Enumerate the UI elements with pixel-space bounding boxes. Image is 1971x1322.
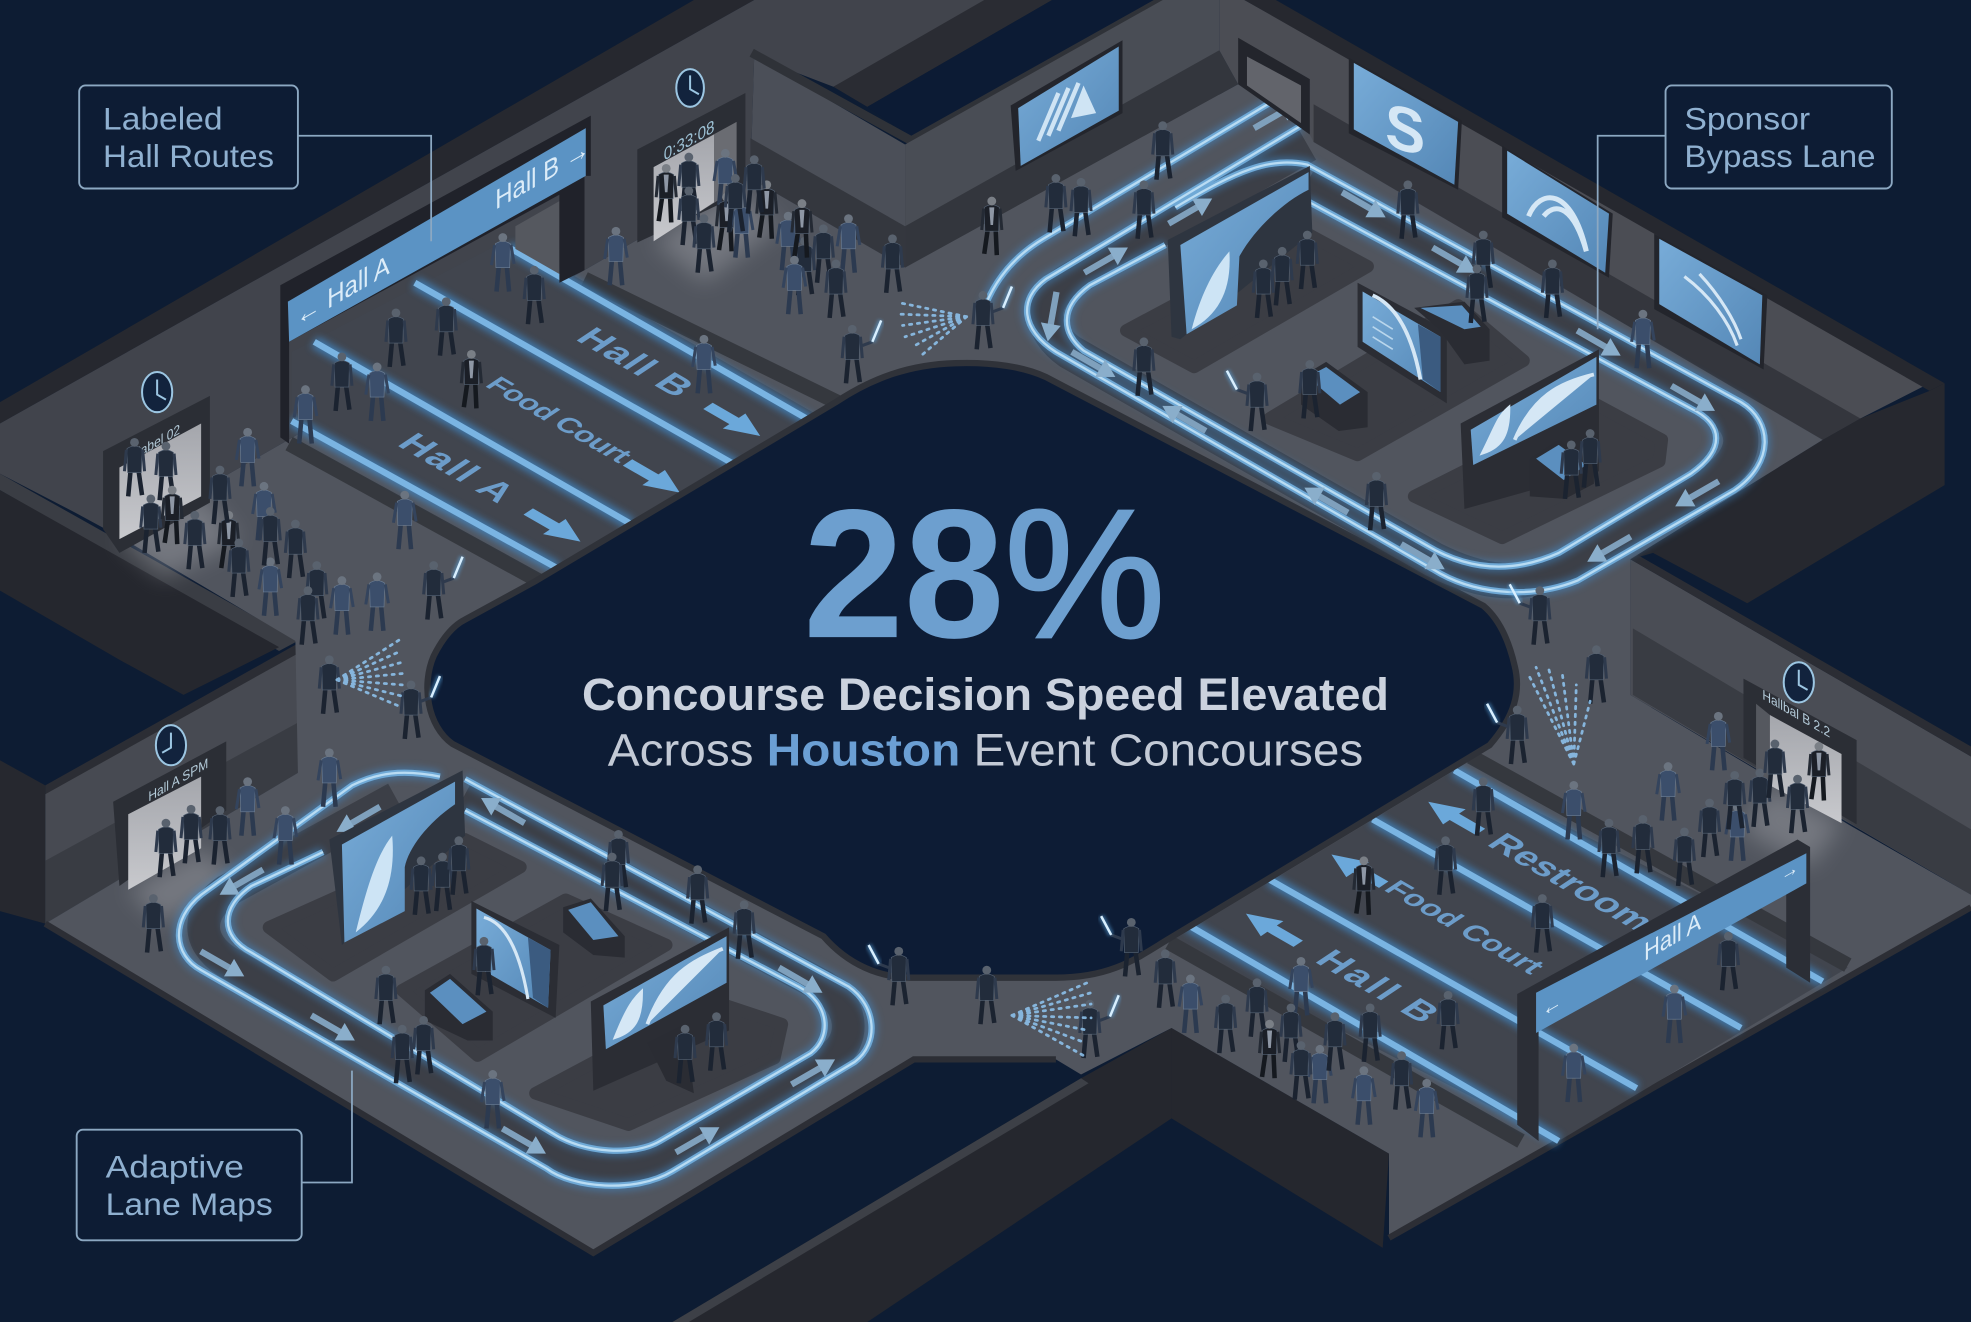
gantry arrow right: → bbox=[1781, 855, 1799, 887]
callout: adaptive lane maps: Lane Maps bbox=[106, 1187, 273, 1222]
hall top-left floor bbox=[289, 201, 842, 582]
door lower right: Hallbal B 2.2 bbox=[1762, 686, 1830, 741]
gantry text Hall A: ← Hall A bbox=[297, 248, 390, 333]
booths lower left bbox=[329, 770, 729, 1093]
screen swoosh bbox=[1502, 146, 1613, 278]
callout: labeled hall routes: Hall Routes bbox=[103, 139, 274, 174]
kiosks bbox=[1301, 302, 1594, 499]
booth 1 bbox=[1168, 166, 1312, 339]
door left: Hlabel 02 bbox=[129, 420, 180, 465]
people: lower-left zone bbox=[143, 748, 909, 1128]
callout: labeled hall routes bbox=[79, 85, 431, 241]
door lower left: Hall A SPM bbox=[148, 754, 208, 805]
clocks bbox=[142, 69, 1814, 765]
track arrows lower left bbox=[196, 789, 840, 1162]
callout: sponsor bypass lane: Sponsor bbox=[1684, 101, 1810, 136]
people: lower-right zone bbox=[1354, 645, 1829, 1102]
headline line 2: Across Houston Event Concourses bbox=[608, 724, 1363, 775]
floor label Hall A: Hall A bbox=[390, 427, 525, 508]
callout: labeled hall routes: Labeled bbox=[103, 101, 222, 136]
screen letter S: S bbox=[1385, 90, 1425, 170]
track loop: adaptive lane maps bbox=[179, 773, 872, 1186]
door upper right bbox=[1238, 38, 1310, 134]
gantry arrow left: ← bbox=[1542, 987, 1562, 1023]
gantry text Hall A lower: Hall A bbox=[1644, 906, 1701, 967]
screen letter S bbox=[1349, 58, 1462, 190]
booth 1 bbox=[329, 770, 465, 945]
people: top-left crowd bbox=[605, 149, 1002, 383]
central void bbox=[427, 363, 1517, 978]
track arrows upper right bbox=[1038, 94, 1724, 578]
headline stat: 28% bbox=[803, 471, 1165, 676]
callout: sponsor bypass lane: Bypass Lane bbox=[1684, 139, 1875, 174]
floor label Hall B lower: Hall B bbox=[1307, 943, 1449, 1028]
booth 3 bbox=[591, 927, 729, 1091]
service dark plates bbox=[1126, 234, 1662, 538]
light beam fans bbox=[337, 303, 1590, 1056]
door lower left bbox=[113, 741, 226, 890]
floor light spills at doors bbox=[119, 188, 1842, 924]
booth 2 bbox=[471, 901, 559, 1018]
callout: adaptive lane maps bbox=[77, 1071, 352, 1240]
screen logo stripes bbox=[1011, 40, 1123, 171]
hall floor labels bbox=[390, 321, 1663, 1028]
door left bbox=[103, 396, 210, 553]
callout: adaptive lane maps: Adaptive bbox=[106, 1149, 244, 1184]
floor label Hall B: Hall B bbox=[568, 321, 704, 403]
floor label Food Court lower: Food Court bbox=[1377, 876, 1551, 979]
wall screens bbox=[1011, 40, 1767, 369]
gantry text Hall B: Hall B → bbox=[495, 130, 590, 216]
screen swoosh right bbox=[1654, 234, 1767, 369]
gantry sign top-left bbox=[280, 116, 591, 444]
floor rim bbox=[45, 907, 1971, 1253]
people: upper-right loop bbox=[973, 121, 1654, 645]
door top left bbox=[637, 93, 745, 243]
door top left: 0:33:08 bbox=[664, 115, 715, 165]
lower dark plates bbox=[269, 839, 782, 1125]
booth 3 bbox=[1461, 349, 1599, 509]
headline line 1: Concourse Decision Speed Elevated bbox=[582, 669, 1389, 720]
gantry sign bottom-right bbox=[1517, 839, 1810, 1141]
floor label Restroom: Restroom bbox=[1479, 828, 1663, 937]
hall bottom-right floor bbox=[1169, 757, 1848, 1141]
kiosks bbox=[425, 899, 694, 1093]
people: upper hall bbox=[294, 233, 715, 549]
floor label Food Court: Food Court bbox=[478, 373, 639, 468]
booth 2 bbox=[1358, 283, 1447, 403]
people: bottom crowd bbox=[977, 916, 1458, 1137]
hall floor arrows bbox=[517, 398, 1492, 951]
track loop: sponsor bypass lane bbox=[983, 84, 1765, 592]
door lower right bbox=[1743, 679, 1857, 824]
booths upper right bbox=[1168, 166, 1599, 509]
people: left crowd bbox=[124, 428, 463, 739]
callout: sponsor bypass lane bbox=[1598, 85, 1892, 329]
